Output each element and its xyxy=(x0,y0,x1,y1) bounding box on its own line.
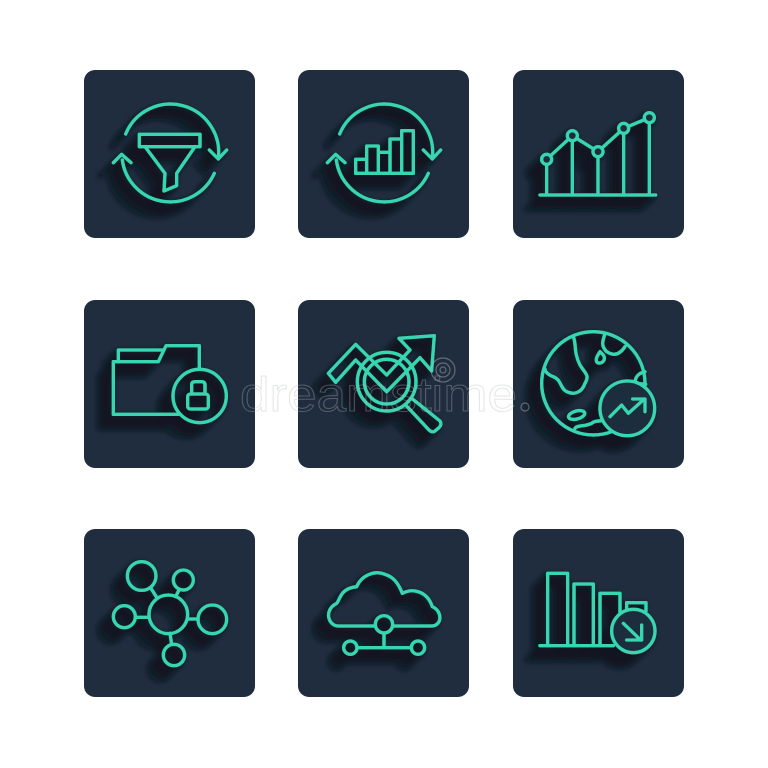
icon: bar chart with circular arrows xyxy=(327,104,441,202)
watermark: dreamstime xyxy=(240,369,517,422)
panel: funnel refresh xyxy=(84,70,255,238)
icon: hub and spoke nodes xyxy=(113,562,227,666)
icon: globe with trend badge xyxy=(542,332,655,436)
panel: trend magnifier xyxy=(298,300,469,468)
panel: line and bar chart xyxy=(513,70,684,238)
panel: locked folder xyxy=(84,300,255,468)
icon: arrow and magnifying glass xyxy=(328,336,441,432)
icon: folder with padlock xyxy=(113,346,226,423)
icon: funnel with circular arrows xyxy=(113,104,227,202)
panel: network hub xyxy=(84,529,255,697)
panel: declining bars xyxy=(513,529,684,697)
icon: falling bar chart with stopwatch xyxy=(540,573,655,653)
panel: global growth xyxy=(513,300,684,468)
icon: cloud with connected nodes xyxy=(329,573,440,654)
panel: cloud network xyxy=(298,529,469,697)
icon: rising line chart xyxy=(540,113,656,195)
panel: bars refresh xyxy=(298,70,469,238)
